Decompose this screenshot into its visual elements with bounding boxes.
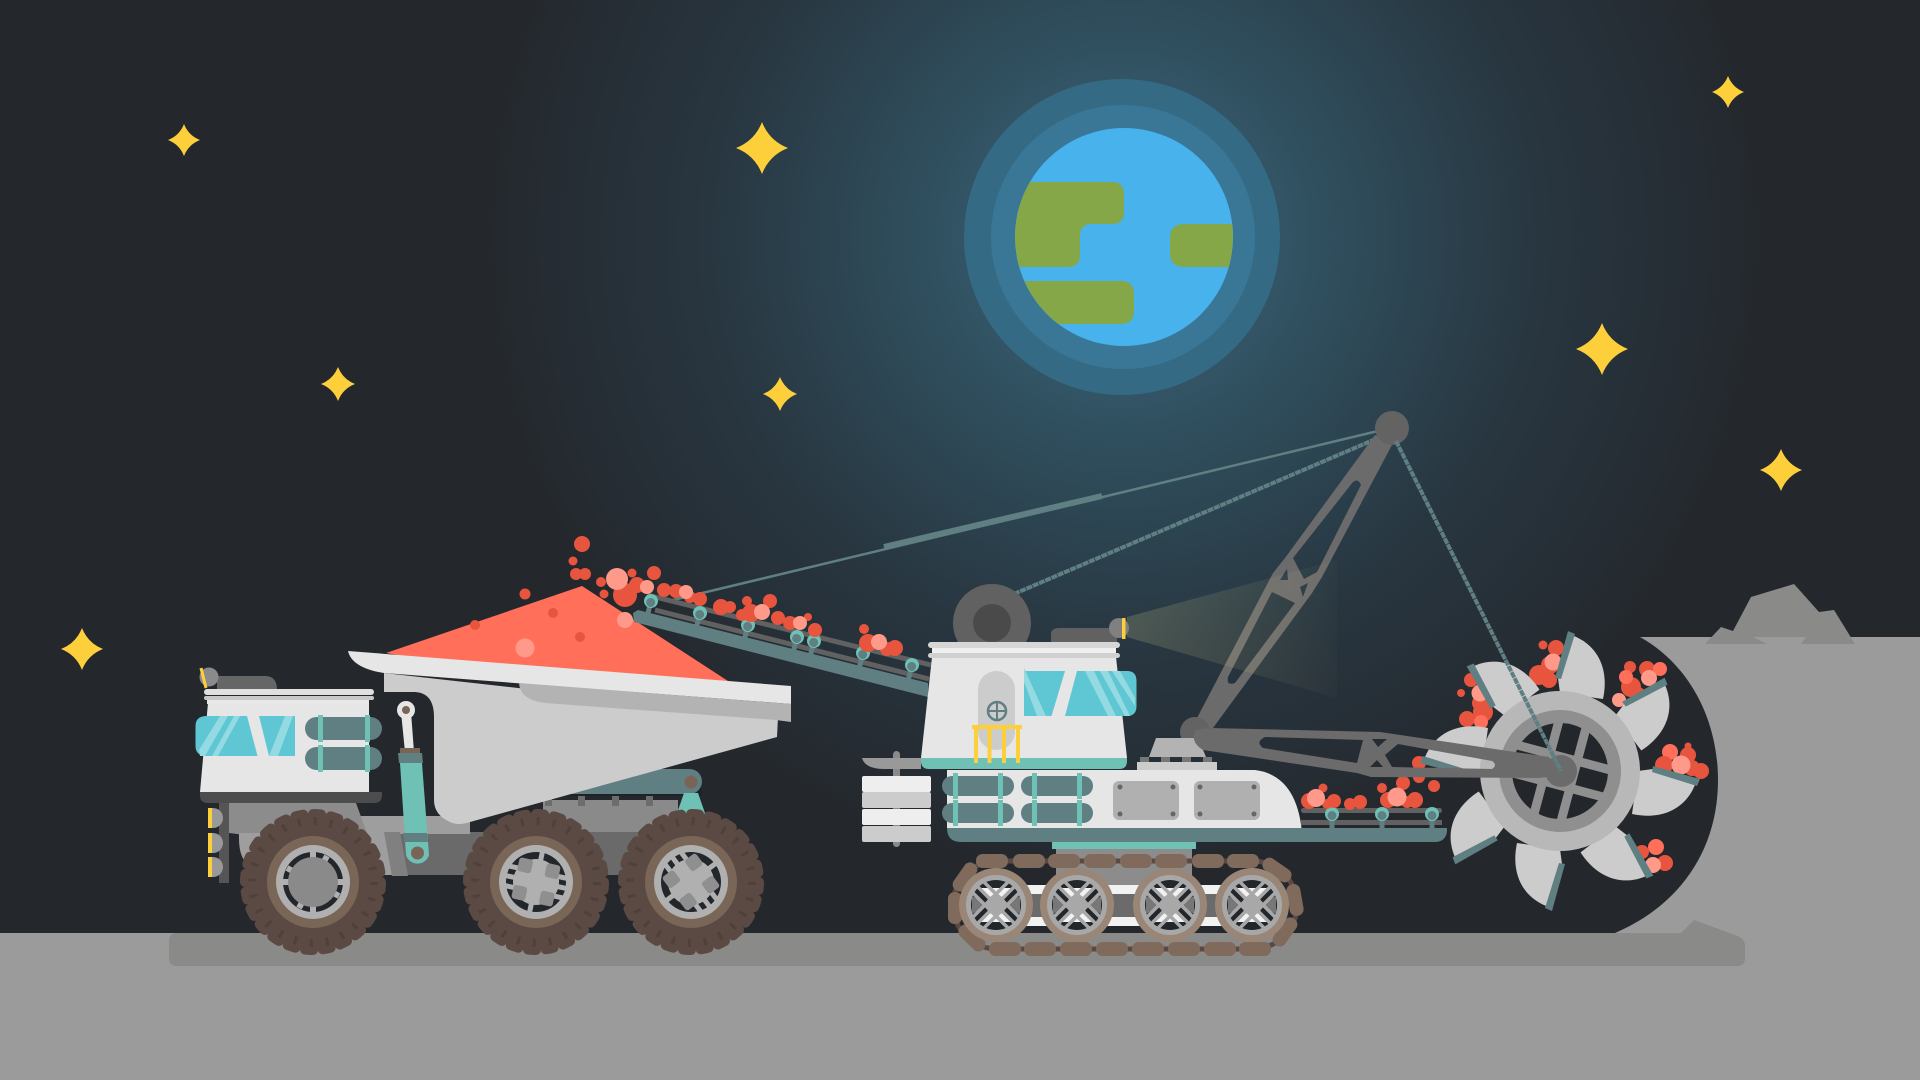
truck teal arm and hinge xyxy=(520,769,706,816)
wheel buckets xyxy=(1420,631,1700,911)
excavator pulley drum xyxy=(953,584,1031,662)
body access panels xyxy=(1113,781,1260,820)
crawler road wheels xyxy=(959,868,1289,942)
stars xyxy=(61,76,1802,670)
body chassis strip xyxy=(947,828,1447,842)
truck roof hump and beacon xyxy=(200,668,277,690)
planet earth xyxy=(964,79,1280,395)
ground xyxy=(0,933,1920,1080)
dump bed xyxy=(348,586,791,824)
excavator cab xyxy=(921,642,1127,769)
ore in buckets xyxy=(1412,640,1709,873)
truck cab body xyxy=(200,703,369,792)
rock pile on cliff xyxy=(1705,584,1855,644)
crawler track links xyxy=(948,854,1305,956)
wheel hub pin xyxy=(1545,755,1577,787)
excavator cab windows xyxy=(1024,668,1136,716)
bed rim xyxy=(348,651,791,704)
truck side tanks xyxy=(305,715,382,772)
truck rear frame xyxy=(356,788,702,876)
truck cab roof xyxy=(204,689,374,704)
bed shadow strip xyxy=(519,683,791,722)
yellow railing xyxy=(972,727,1022,763)
truck windows xyxy=(196,716,295,756)
ore pile in bed xyxy=(386,586,728,690)
road band xyxy=(169,920,1745,966)
truck hydraulic piston xyxy=(397,701,429,864)
excavator boom xyxy=(1197,435,1393,728)
cable to bucket wheel xyxy=(1396,441,1561,771)
ore on lower conveyor xyxy=(1301,776,1440,810)
ore falling from conveyor xyxy=(520,536,903,656)
ore spots on pile xyxy=(470,608,633,658)
excavator counterweights xyxy=(862,751,931,847)
excavator main body xyxy=(947,770,1302,828)
upper conveyor belt xyxy=(633,593,931,697)
excavator headlamp light beam xyxy=(1127,560,1337,698)
bucket wheel xyxy=(1420,631,1700,911)
boom pivot and top knob xyxy=(1180,411,1409,747)
crawler undercarriage xyxy=(948,842,1305,956)
dump truck xyxy=(196,586,791,950)
cables from boom top xyxy=(673,431,1378,600)
excavator turret mount xyxy=(1137,738,1217,770)
truck wheels xyxy=(245,814,759,950)
body side tanks xyxy=(942,773,1093,826)
excavator headlamp xyxy=(1051,618,1129,643)
bucket wheel arm xyxy=(1194,728,1562,778)
truck front lights xyxy=(208,808,223,877)
lower conveyor belt xyxy=(1301,807,1442,829)
truck cab frame xyxy=(219,803,368,883)
cab door with porthole xyxy=(978,671,1015,750)
wheel hub rings xyxy=(1462,673,1658,869)
cliff face with excavated pit xyxy=(1600,637,1920,1000)
truck cab base xyxy=(200,792,382,803)
